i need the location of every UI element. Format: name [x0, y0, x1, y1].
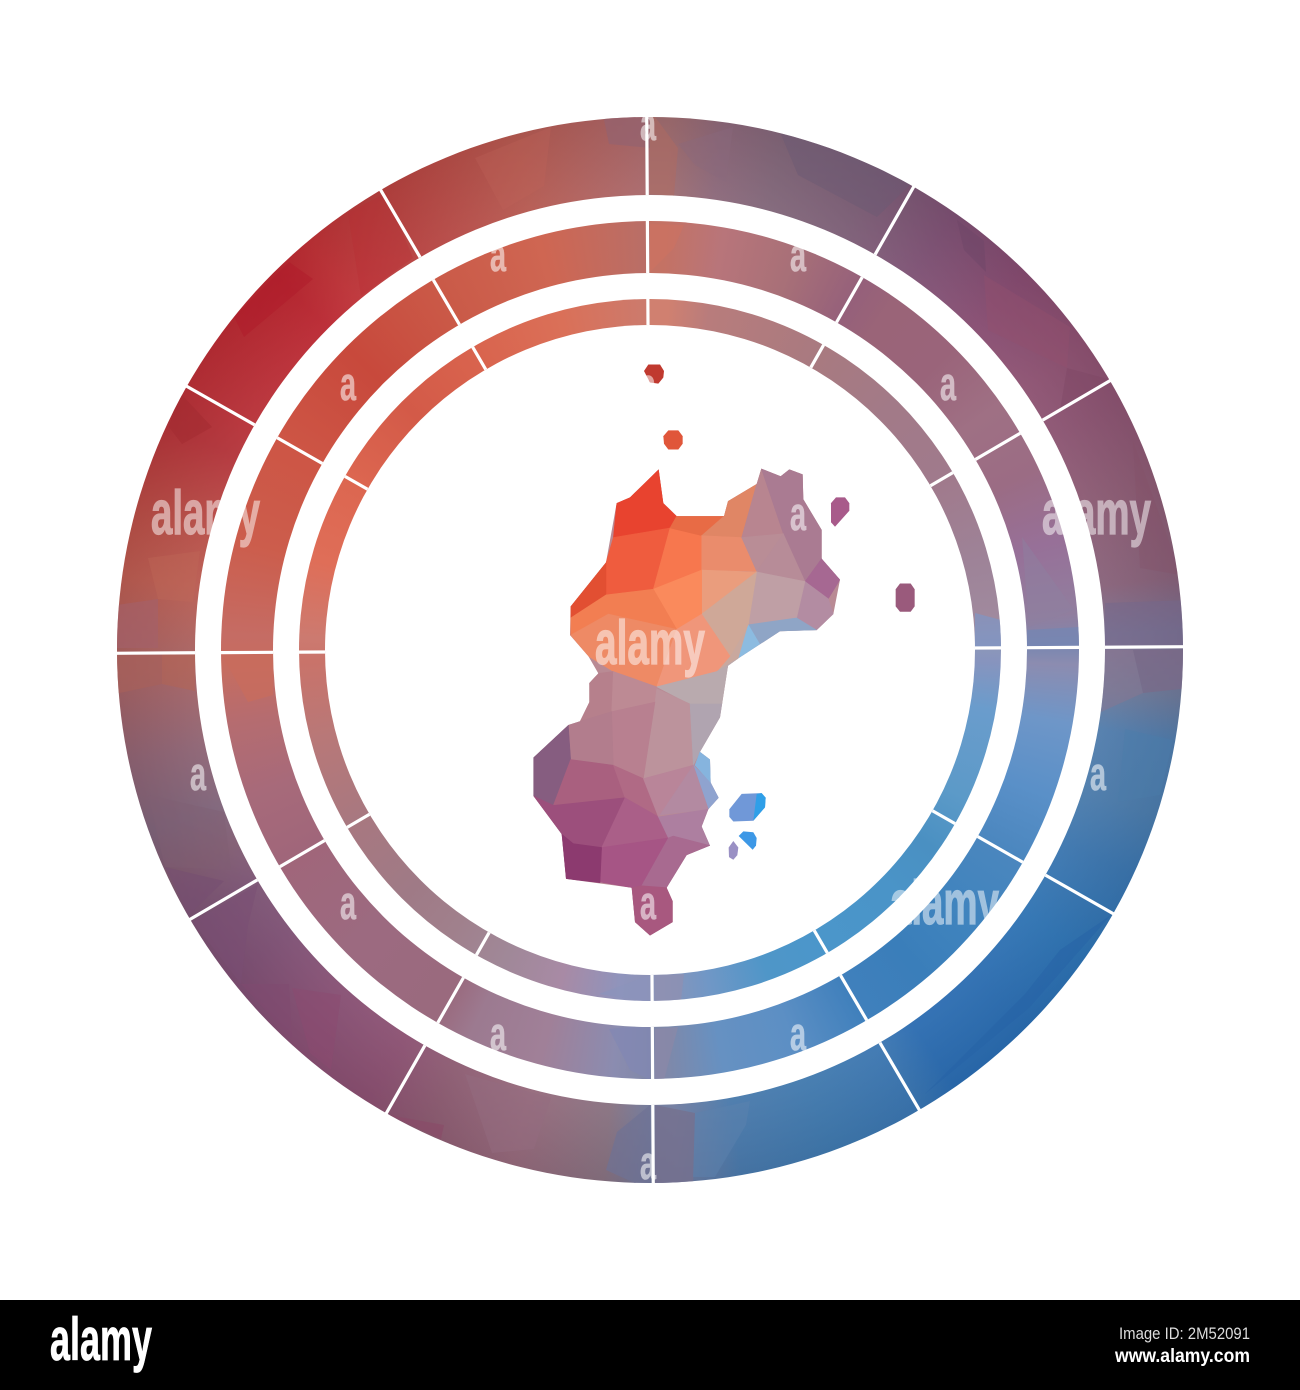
watermark: small a marks: a — [640, 876, 657, 929]
watermark: small a marks: a — [790, 228, 807, 281]
watermark: small a marks: a — [340, 357, 357, 410]
island map — [530, 365, 915, 939]
badge artwork overlay — [117, 117, 1183, 1183]
watermark: large alamy marks: alamy — [151, 479, 260, 548]
watermark: small a marks: a — [790, 1007, 807, 1060]
small blue islands — [729, 793, 766, 860]
footer logo and image id: Image ID: 2M52091 — [1119, 1324, 1250, 1343]
watermark: large alamy marks: alamy — [890, 869, 999, 938]
panel: middle ring — [221, 221, 1079, 1079]
gap: outer white circle — [195, 195, 1105, 1105]
watermark: small a marks: a — [340, 876, 357, 929]
watermark: small a marks: a — [490, 1007, 507, 1060]
ring dividers — [107, 107, 1193, 1193]
gap: centre white circle — [325, 325, 975, 975]
small eastern islands — [831, 497, 915, 612]
main island facets — [530, 465, 843, 939]
watermark: small a marks: a — [640, 358, 657, 411]
watermark: small a marks: a — [940, 357, 957, 410]
panel: outer ring — [117, 117, 1183, 1183]
watermark: small a marks: a — [640, 97, 657, 150]
footer logo and image id: alamy — [50, 1306, 152, 1373]
footer bar — [0, 1300, 1300, 1390]
watermark: small a marks: a — [790, 487, 807, 540]
watermark: small a marks: a — [490, 228, 507, 281]
gap: middle white circle — [273, 273, 1027, 1027]
watermark: small a marks — [190, 97, 1107, 1189]
footer logo and image id — [50, 1306, 1250, 1373]
watermark: small a marks: a — [640, 1136, 657, 1189]
footer logo and image id: www.alamy.com — [1114, 1346, 1250, 1367]
low-poly facets on rings — [110, 110, 1190, 1190]
watermark: large alamy marks: alamy — [1042, 479, 1151, 548]
watermark: small a marks: a — [190, 747, 207, 800]
watermark: small a marks: a — [1090, 747, 1107, 800]
small northern islands — [644, 365, 683, 450]
watermark: large alamy marks — [151, 479, 1151, 938]
panel: inner ring — [299, 299, 1001, 1001]
watermark: large alamy marks: alamy — [595, 609, 705, 678]
